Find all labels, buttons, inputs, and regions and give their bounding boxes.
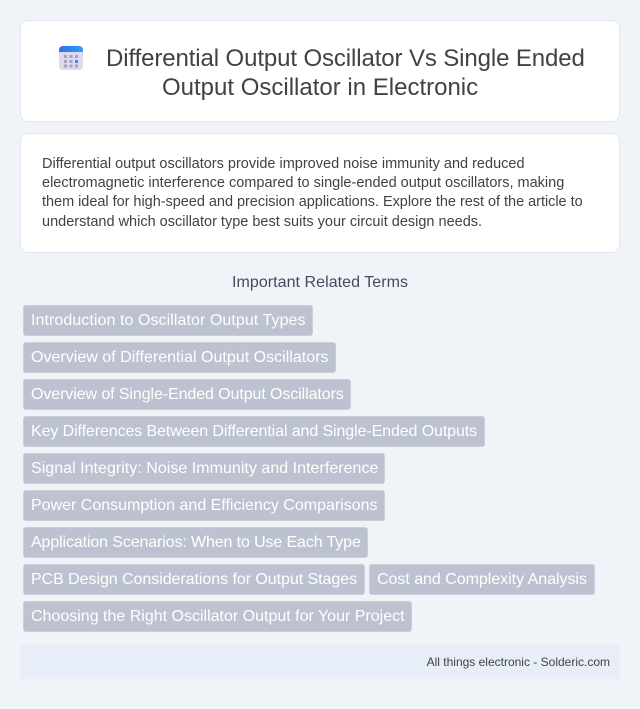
tag — [23, 342, 336, 373]
tag — [23, 601, 412, 632]
tag — [369, 564, 595, 595]
tag: Key Differences Between Differential and Single-Ended Outputs — [31, 423, 477, 440]
tag: PCB Design Considerations for Output Stages — [31, 571, 357, 588]
tag: Introduction to Oscillator Output Types — [31, 312, 306, 329]
title — [106, 45, 585, 101]
tag: Choosing the Right Oscillator Output for Your Project — [31, 608, 405, 625]
tag: Overview of Differential Output Oscillators — [31, 349, 329, 366]
description text: electromagnetic interference compared to single-ended output oscillators, making — [42, 175, 564, 191]
tag — [23, 564, 365, 595]
description text — [42, 156, 583, 230]
tag — [23, 490, 385, 521]
tag — [23, 416, 485, 447]
description text: understand which oscillator type best suits your circuit design needs. — [42, 214, 482, 230]
tag — [23, 305, 313, 336]
description text: them ideal for high-speed and precision applications. Explore the rest of the article to — [42, 194, 583, 210]
footer bar — [20, 645, 620, 679]
footer bar: All things electronic - Solderic.com — [427, 655, 610, 669]
tag: Application Scenarios: When to Use Each Type — [31, 534, 361, 551]
title: Differential Output Oscillator Vs Single Ended — [106, 45, 585, 72]
icon: calendar — [59, 46, 83, 70]
tag: Cost and Complexity Analysis — [377, 571, 587, 588]
title: Output Oscillator in Electronic — [162, 74, 478, 101]
description text: Differential output oscillators provide improved noise immunity and reduced — [42, 156, 525, 172]
tag — [23, 453, 385, 484]
tag — [23, 527, 368, 558]
heading: important related terms: Important Related Terms — [232, 274, 408, 291]
tag — [23, 379, 351, 410]
tag: Overview of Single-Ended Output Oscillators — [31, 386, 344, 403]
panel: description card — [20, 133, 620, 253]
tag: Power Consumption and Efficiency Comparisons — [31, 497, 378, 514]
tag: Signal Integrity: Noise Immunity and Interference — [31, 460, 378, 477]
panel: header card — [20, 20, 620, 122]
